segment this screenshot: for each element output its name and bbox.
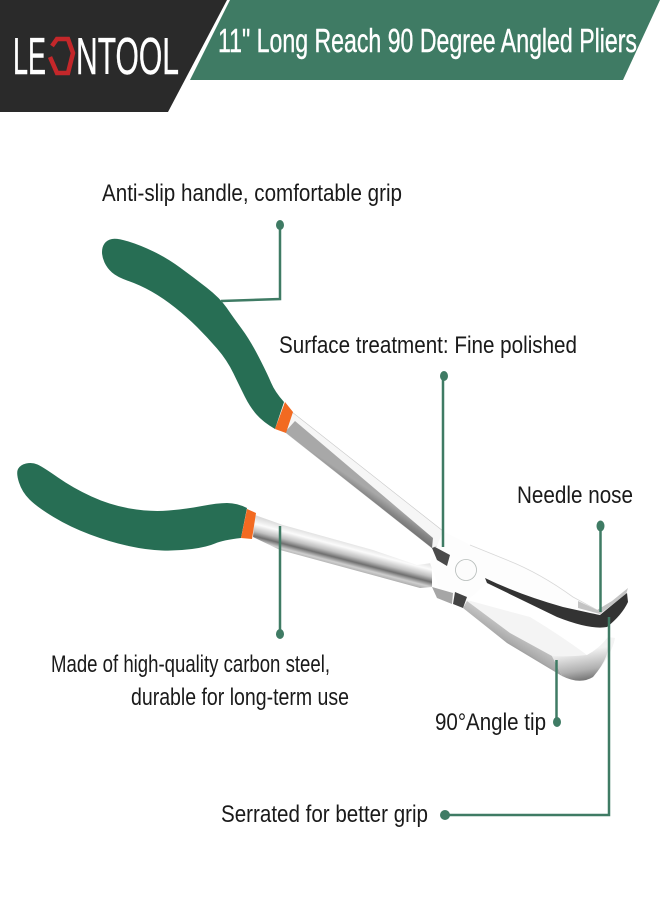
upper orange collar [275, 402, 293, 433]
pliers illustration [17, 239, 628, 681]
knuckle [432, 587, 453, 604]
leader: serrated [445, 617, 609, 815]
leader: surface [442, 376, 444, 547]
joint dark pieces [432, 547, 450, 566]
logo wordmark [13, 28, 179, 86]
jaw gap shadow [485, 578, 628, 628]
jaw body [430, 531, 628, 627]
leader: carbon steel [279, 526, 281, 634]
label: serrated: Serrated for better grip [221, 801, 428, 828]
lower jaw corner [552, 637, 609, 681]
lower orange collar [241, 509, 256, 539]
label: carbon steel: Made of high-quality carbon steel, [51, 651, 330, 678]
lower jaw [463, 600, 615, 681]
leader: handle [221, 225, 280, 301]
upper handle grip [102, 239, 284, 429]
callout: carbon steel [51, 526, 349, 711]
logo wordmark: NTOOL [76, 28, 179, 86]
label: handle: Anti-slip handle, comfortable grip [102, 180, 402, 207]
logo wordmark: LE [13, 28, 46, 86]
callout: serrated [221, 617, 609, 828]
lower steel shaft [253, 515, 432, 588]
label: carbon steel: durable for long-term use [131, 684, 349, 711]
leader: angle tip [555, 660, 558, 722]
lower jaw band [463, 601, 562, 676]
upper jaw outline [470, 545, 597, 610]
upper steel shaft [285, 412, 452, 548]
callout: surface treatment [279, 332, 577, 547]
header: title banner [190, 0, 660, 80]
upper jaw shading [578, 588, 628, 614]
label: surface: Surface treatment: Fine polished [279, 332, 577, 359]
header: logo panel [0, 0, 227, 112]
callout: needle nose [517, 482, 633, 612]
lower handle grip [17, 463, 247, 551]
callout: angle tip [435, 660, 561, 736]
label: angle tip: 90°Angle tip [435, 709, 546, 736]
pivot [456, 560, 476, 580]
callout: handle [102, 180, 402, 301]
label: needle nose: Needle nose [517, 482, 633, 509]
leader: needle nose [599, 526, 602, 612]
